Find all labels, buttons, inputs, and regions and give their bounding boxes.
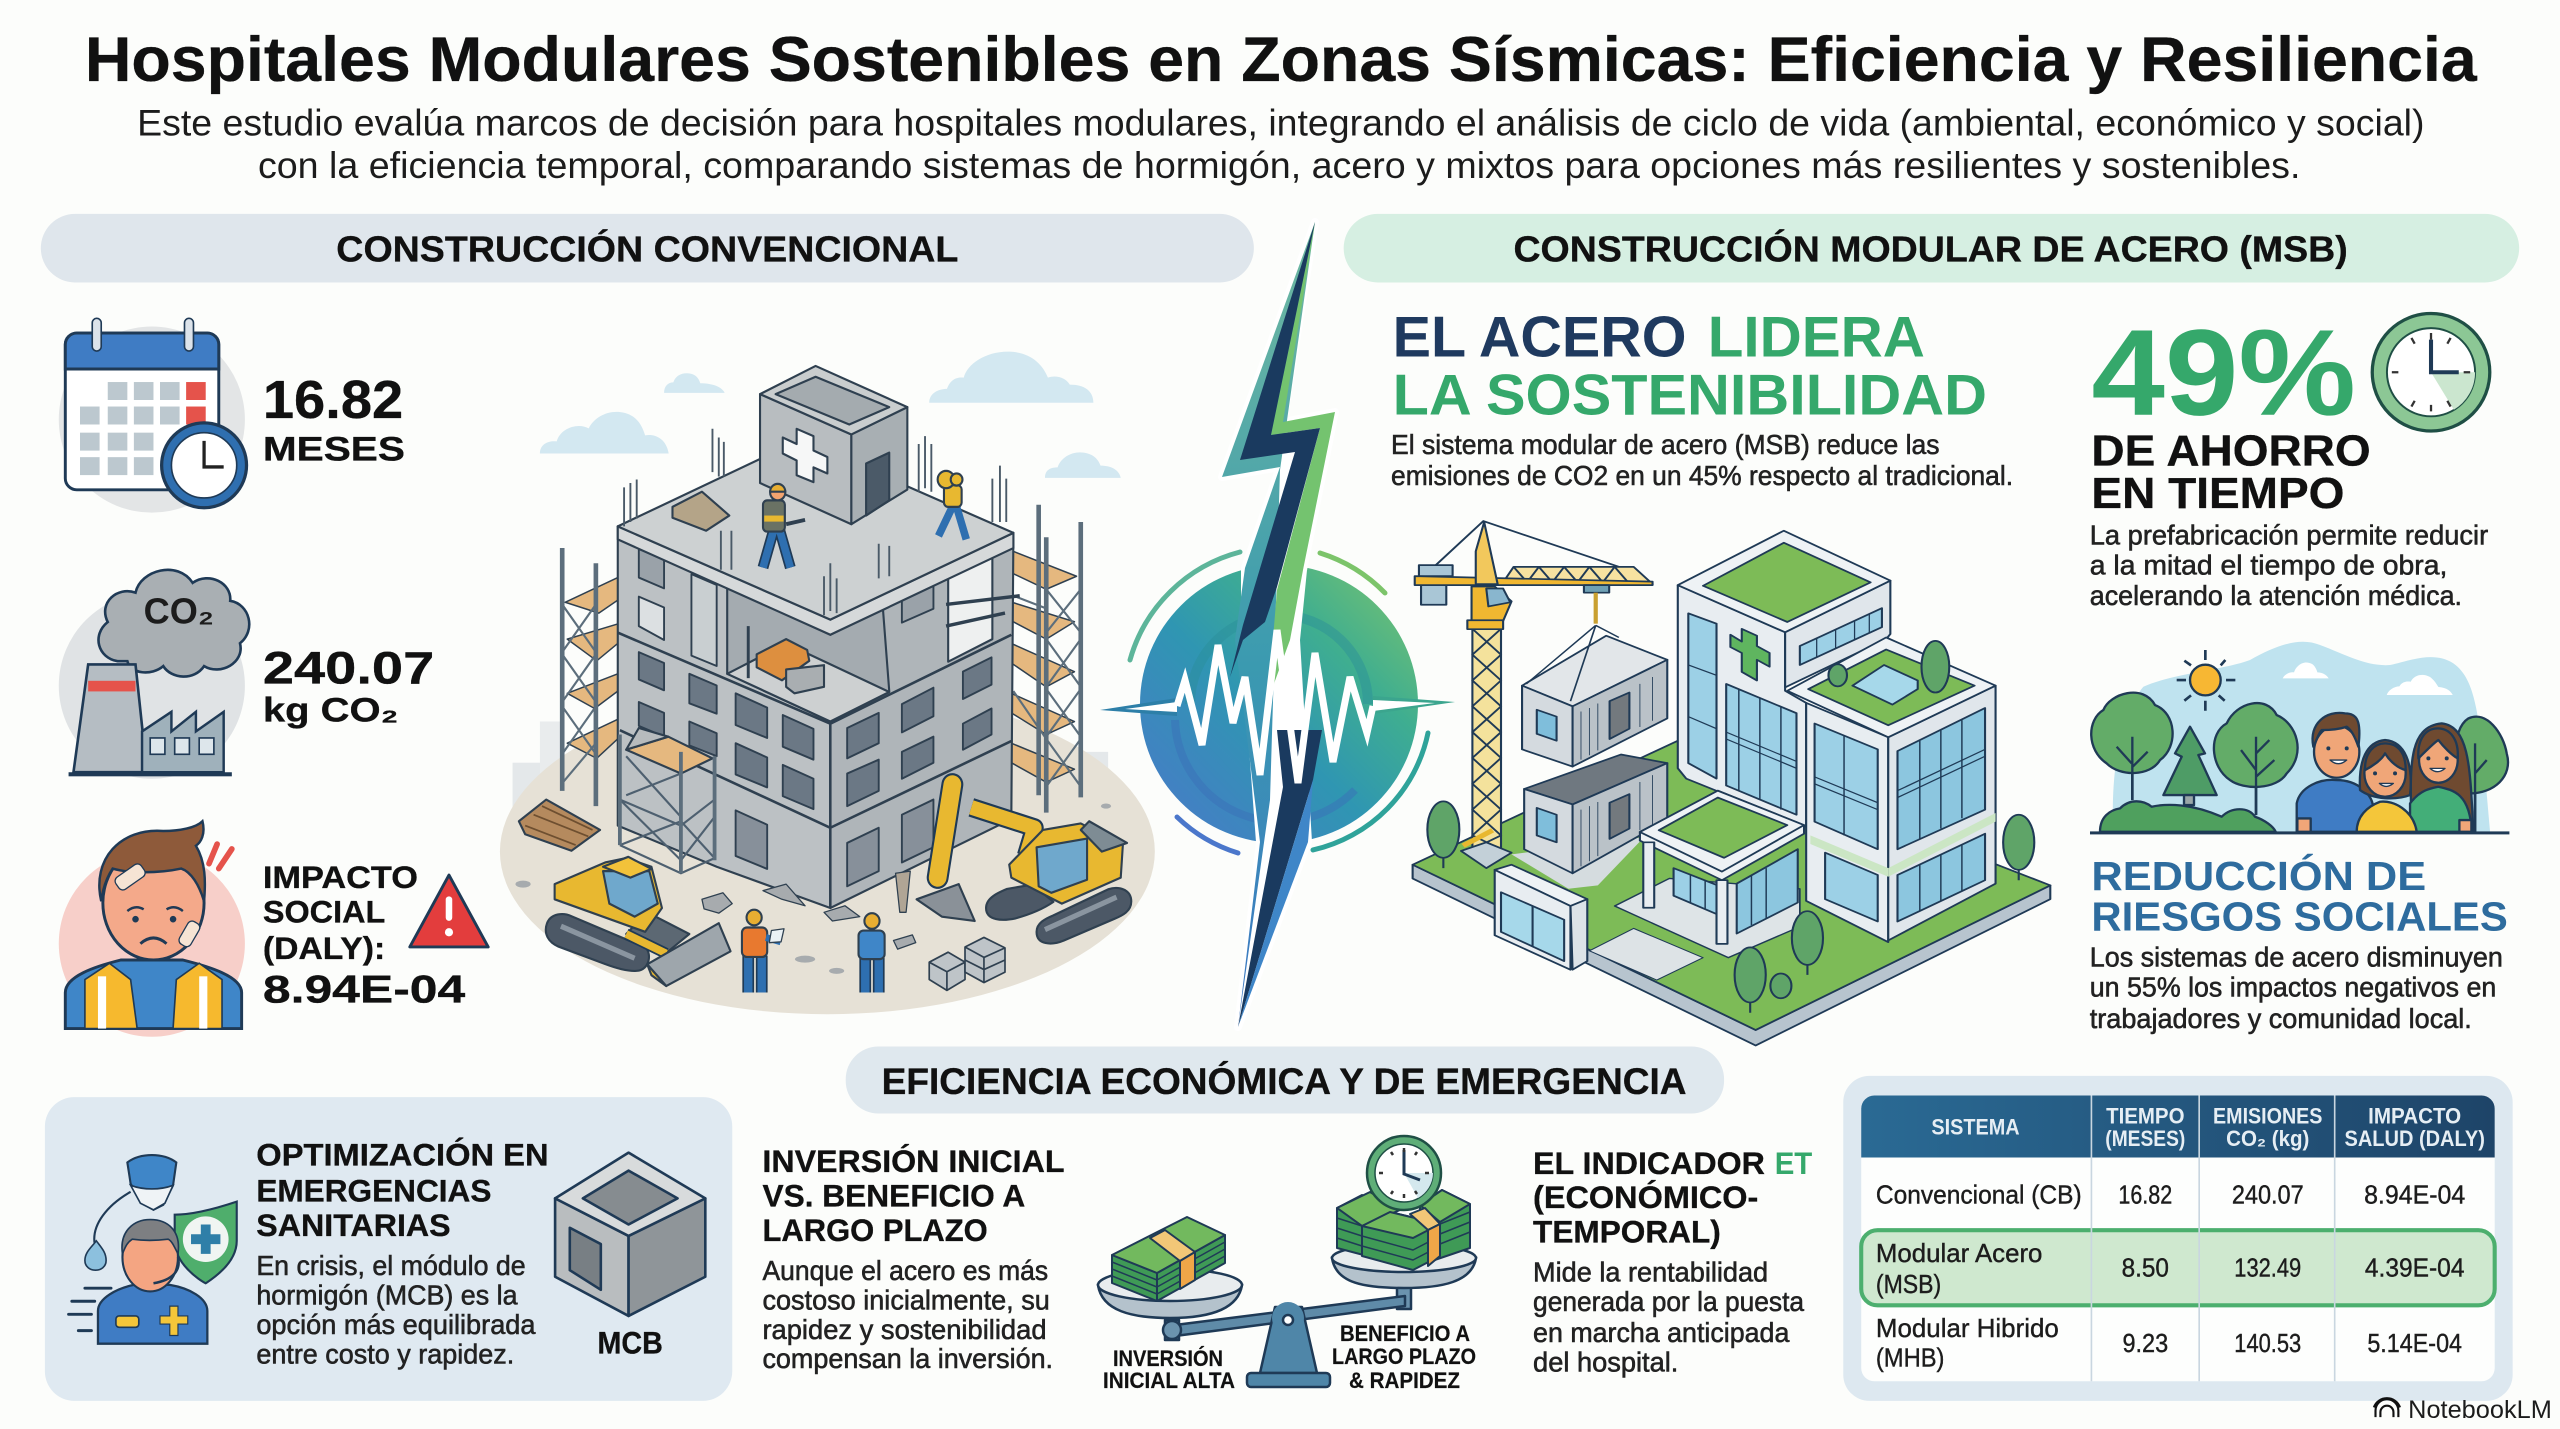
left scaffold: [562, 548, 618, 806]
row: modular steel: Modular Acero: [1876, 1238, 2042, 1268]
rebar: [624, 429, 1006, 615]
table header: (MESES): [2105, 1126, 2185, 1151]
table header: IMPACTO: [2368, 1103, 2461, 1128]
heading: steel leads sustainability: [1393, 306, 1987, 428]
illustration: conventional concrete building site: [500, 352, 1155, 1014]
excavator: [917, 784, 1131, 943]
text: emergencies paragraph: En crisis, el módulo de: [256, 1250, 526, 1281]
hospital tower: [1678, 531, 1890, 827]
label: high initial investment: INVERSIÓN: [1113, 1346, 1223, 1371]
row: modular steel: 132.49: [2234, 1253, 2301, 1283]
heading: ET indicator: TEMPORAL): [1533, 1213, 1721, 1249]
stat: 49 percent: EN TIEMPO: [2091, 470, 2344, 518]
right pan: [1332, 1244, 1476, 1288]
text: time saving paragraph: acelerando la atención médica.: [2090, 580, 2462, 611]
seismic wave: [1100, 630, 1455, 783]
row: conventional: [1876, 1179, 2465, 1209]
icon: factory and CO2 cloud: [59, 570, 249, 779]
text: ET paragraph: del hospital.: [1533, 1346, 1678, 1377]
label: long-term benefit: BENEFICIO A: [1340, 1321, 1470, 1346]
heading: social risk reduction: [2091, 853, 2508, 940]
stat: emissions: 240.07: [263, 642, 434, 693]
site ground: [513, 763, 559, 841]
row: modular hybrid: [1876, 1313, 2462, 1373]
label: high initial investment: INICIAL ALTA: [1103, 1368, 1235, 1393]
stat: social impact: IMPACTO: [263, 859, 418, 895]
stat: social impact: [263, 859, 466, 1011]
building left face: [618, 526, 830, 908]
front trees: [1735, 911, 1823, 1013]
row: modular hybrid: 5.14E-04: [2367, 1328, 2462, 1358]
heading: emergencies: OPTIMIZACIÓN EN: [256, 1137, 549, 1173]
icon: calendar with clock: [59, 318, 247, 513]
rooftop hospital box: [760, 366, 907, 524]
panel heading: modular steel: CONSTRUCCIÓN MODULAR DE ACERO (MSB): [1513, 228, 2348, 270]
text: investment paragraph: costoso inicialmente, su: [762, 1284, 1050, 1315]
table header: EMISIONES: [2213, 1103, 2322, 1128]
illustration: family and nature: [2090, 642, 2509, 834]
text: investment paragraph: Aunque el acero es más: [762, 1255, 1048, 1286]
icon: concrete cube MCB: [555, 1153, 705, 1316]
roof pallet: [672, 492, 729, 531]
subtitle: con la eficiencia temporal, comparando sistemas de hormigón, acero y mixtos para opciones más resilientes y sostenibles.: [258, 145, 2300, 186]
left pan: [1098, 1269, 1242, 1318]
table header: TIEMPO: [2106, 1103, 2184, 1128]
base trees: [1427, 801, 2034, 880]
icon: factory and CO2 cloud: CO₂: [144, 591, 214, 632]
icon: warning triangle: [410, 875, 488, 947]
subtitle: Este estudio evalúa marcos de decisión para hospitales modulares, integrando el análisis de ciclo de vida (ambiental, económico y social): [137, 103, 2424, 144]
clouds: [540, 352, 1121, 478]
heading: social risk reduction: REDUCCIÓN DE: [2091, 853, 2426, 899]
bulldozer: [546, 857, 731, 986]
illustration: balance scale with money and clock: [1098, 1136, 1476, 1393]
woman: [2410, 723, 2473, 832]
text: emergencies paragraph: entre costo y rapidez.: [256, 1338, 514, 1369]
icon: injured worker: [59, 821, 245, 1037]
row: conventional: Convencional (CB): [1876, 1179, 2082, 1209]
label: long-term benefit: [1332, 1321, 1476, 1393]
windows: [639, 549, 992, 886]
text: emergencies paragraph: hormigón (MCB) es la: [256, 1279, 518, 1310]
halo arcs: [1130, 552, 1428, 853]
label: high initial investment: [1103, 1346, 1235, 1393]
ground workers: [742, 910, 885, 993]
text: steel paragraph: [1391, 429, 2013, 491]
subtitle: [137, 103, 2424, 186]
lightning bolt: [1222, 222, 1335, 1027]
stat: emissions: [263, 642, 434, 730]
right scaffold: [1005, 505, 1081, 813]
table header: [1931, 1103, 2485, 1151]
stat: emissions: kg CO₂: [263, 692, 398, 730]
heading: ET indicator: [1533, 1145, 1813, 1249]
stat: 49 percent: 49%: [2091, 304, 2356, 441]
stat: social impact: 8.94E-04: [263, 968, 466, 1011]
stat: months: 16.82: [263, 370, 403, 430]
heading: investment versus benefit: INVERSIÓN INICIAL: [762, 1143, 1064, 1179]
base plot: [1413, 865, 2050, 1045]
table header: CO₂ (kg): [2226, 1126, 2309, 1151]
text: time saving paragraph: [2090, 519, 2488, 611]
text: steel paragraph: El sistema modular de acero (MSB) reduce las: [1391, 429, 1940, 460]
icon: paramedic: [69, 1155, 237, 1344]
panel: health emergency optimisation: [45, 1097, 732, 1401]
row: modular steel: 8.50: [2122, 1253, 2169, 1283]
heading: emergencies: EMERGENCIAS: [256, 1173, 491, 1209]
brand mark: NotebookLM: NotebookLM: [2408, 1396, 2552, 1424]
text: emergencies paragraph: [256, 1250, 536, 1369]
text: ET paragraph: en marcha anticipada: [1533, 1317, 1790, 1348]
entry block: [1495, 865, 1587, 970]
text: social risk paragraph: [2090, 942, 2503, 1034]
open floor cavity: [727, 587, 889, 722]
title: Hospitales Modulares Sostenibles en Zonas Sísmicas: Eficiencia y Resiliencia: [85, 25, 2478, 95]
front pavilion: [1640, 791, 1804, 944]
man: [2297, 713, 2373, 832]
row: modular hybrid: 140.53: [2234, 1328, 2301, 1358]
row: conventional: 16.82: [2118, 1179, 2172, 1209]
panel heading: modular steel: [1344, 214, 2519, 282]
logs: [519, 800, 600, 851]
heading: investment versus benefit: VS. BENEFICIO A: [762, 1178, 1025, 1214]
panel heading: conventional: CONSTRUCCIÓN CONVENCIONAL: [336, 228, 958, 270]
panel heading: economic efficiency: [846, 1047, 1724, 1113]
roof worker 1: [763, 484, 805, 568]
table header: SALUD (DALY): [2344, 1126, 2485, 1151]
row: modular hybrid: Modular Hibrido: [1876, 1313, 2059, 1343]
heading: emergencies: SANITARIAS: [256, 1207, 451, 1243]
label: long-term benefit: LARGO PLAZO: [1332, 1344, 1476, 1369]
text: social risk paragraph: trabajadores y comunidad local.: [2090, 1003, 2472, 1034]
text: time saving paragraph: a la mitad el tiempo de obra,: [2090, 550, 2447, 581]
row: modular steel: (MSB): [1876, 1269, 1941, 1299]
crane: [1415, 521, 1653, 868]
heading: steel leads sustainability: LIDERA: [1708, 306, 1925, 370]
text: ET paragraph: generada por la puesta: [1533, 1286, 1805, 1317]
label: long-term benefit: & RAPIDEZ: [1349, 1368, 1460, 1393]
row: modular steel: [1876, 1238, 2464, 1299]
heading: steel leads sustainability: LA SOSTENIBILIDAD: [1393, 364, 1987, 428]
wave disc: [1140, 565, 1418, 843]
heading: steel leads sustainability: EL ACERO: [1393, 306, 1687, 370]
text: investment paragraph: rapidez y sostenibilidad: [762, 1314, 1047, 1345]
lower steel module: [1524, 755, 1667, 873]
clock on scale: [1367, 1136, 1441, 1210]
heading: emergencies: [256, 1137, 549, 1243]
panel heading: economic efficiency: EFICIENCIA ECONÓMICA Y DE EMERGENCIA: [882, 1060, 1687, 1102]
row: modular steel: 4.39E-04: [2365, 1253, 2464, 1283]
heading: investment versus benefit: LARGO PLAZO: [762, 1212, 988, 1248]
label: MCB: MCB: [598, 1325, 663, 1360]
rubble: [515, 803, 1111, 974]
roof slab: [618, 526, 1013, 635]
text: steel paragraph: emisiones de CO2 en un 45% respecto al tradicional.: [1391, 460, 2013, 491]
illustration: seismic bolt and wave emblem: [1100, 222, 1455, 1027]
row: modular hybrid: (MHB): [1876, 1343, 1944, 1373]
text: time saving paragraph: La prefabricación permite reducir: [2090, 519, 2488, 550]
row: modular hybrid: 9.23: [2122, 1328, 2168, 1358]
heading: ET indicator: (ECONÓMICO-: [1533, 1179, 1758, 1215]
row: conventional: 240.07: [2232, 1179, 2304, 1209]
stat: 49 percent: DE AHORRO: [2091, 427, 2371, 475]
illustration: modular hospital under construction: [1413, 521, 2050, 1045]
stat: months: MESES: [263, 430, 405, 468]
stat: social impact: (DALY):: [263, 930, 385, 966]
text: emergencies paragraph: opción más equilibrada: [256, 1309, 536, 1340]
text: social risk paragraph: Los sistemas de acero disminuyen: [2090, 942, 2503, 973]
text: ET paragraph: [1533, 1257, 1805, 1377]
girl: [2357, 740, 2417, 832]
heading: ET indicator: EL INDICADOR: [1533, 1145, 1765, 1181]
highlighted row: [1861, 1230, 2495, 1305]
stat: social impact: SOCIAL: [263, 893, 385, 929]
concrete blocks: [929, 937, 1005, 990]
right money stacks: [1337, 1190, 1470, 1270]
row: conventional: 8.94E-04: [2364, 1179, 2465, 1209]
panel heading: conventional: [41, 214, 1254, 282]
sun: [2177, 650, 2235, 711]
comparison table: [1843, 1076, 2513, 1401]
text: social risk paragraph: un 55% los impactos negativos en: [2090, 972, 2496, 1003]
stat: months: [263, 370, 405, 468]
left money stack: [1112, 1217, 1225, 1301]
trees: [2091, 693, 2508, 832]
icon: green clock: [2372, 313, 2490, 431]
open corner right: [948, 553, 992, 662]
right block: [1787, 637, 1996, 942]
building right face: [830, 533, 1013, 908]
stat: 49 percent: [2091, 304, 2371, 518]
table header: SISTEMA: [1931, 1115, 2020, 1140]
text: ET paragraph: Mide la rentabilidad: [1533, 1257, 1768, 1288]
heading: investment versus benefit: [762, 1143, 1064, 1248]
text: investment paragraph: compensan la inversión.: [762, 1343, 1053, 1374]
heading: social risk reduction: RIESGOS SOCIALES: [2091, 894, 2508, 940]
roof worker 2: [938, 471, 966, 539]
front scaffold: [620, 728, 715, 873]
hanging steel module: [1522, 625, 1667, 767]
heading: ET indicator: ET: [1775, 1145, 1813, 1181]
text: investment paragraph: [762, 1255, 1053, 1374]
scale stand: [1163, 1285, 1411, 1387]
